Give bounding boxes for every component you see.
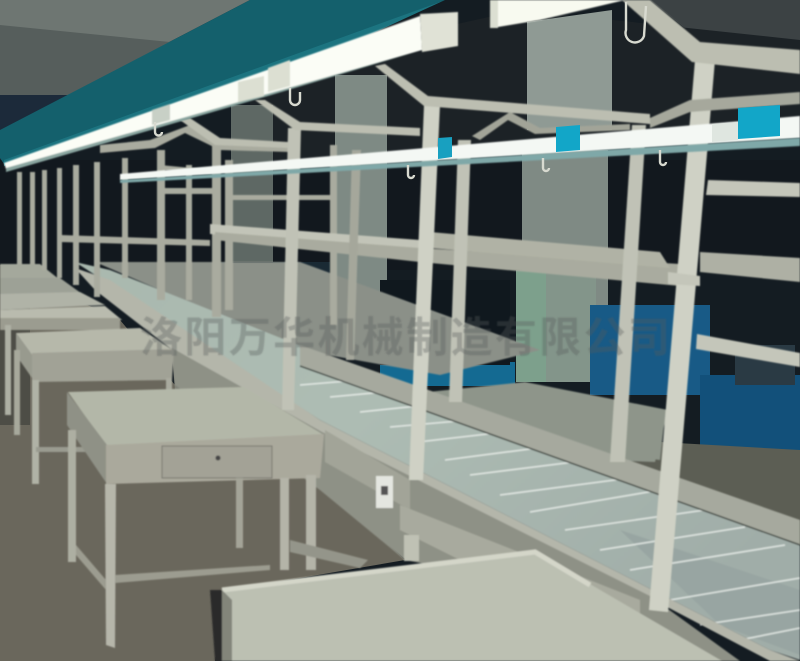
rear table behind conveyor bbox=[428, 382, 668, 462]
conveyor front rail and apron bbox=[75, 268, 800, 661]
watermark: 洛阳万华机械制造有限公司 bbox=[140, 314, 670, 361]
concrete columns bbox=[231, 10, 612, 382]
front table bbox=[210, 552, 722, 661]
front posts bbox=[404, 60, 715, 612]
distant tables stack bbox=[0, 264, 122, 415]
factory floor right bbox=[625, 440, 800, 545]
main light fixture bbox=[4, 0, 625, 172]
table 3 bbox=[14, 328, 174, 484]
top frame bars bbox=[180, 0, 800, 148]
side rails right bbox=[668, 180, 800, 367]
teal air duct bbox=[0, 0, 445, 164]
conveyor roller surface bbox=[75, 262, 800, 660]
rear conveyor rail bbox=[300, 345, 800, 545]
socket on apron bbox=[376, 476, 393, 508]
rear shelving surface bbox=[95, 262, 540, 375]
background frame bars bbox=[17, 125, 337, 325]
factory floor left bbox=[0, 265, 405, 661]
rear light strip bbox=[120, 105, 800, 183]
long shelf bbox=[210, 224, 800, 286]
blue crates in the background bbox=[220, 262, 800, 450]
table 2 bbox=[67, 387, 368, 648]
rear uprights bbox=[282, 125, 646, 462]
hooks bbox=[155, 2, 666, 178]
